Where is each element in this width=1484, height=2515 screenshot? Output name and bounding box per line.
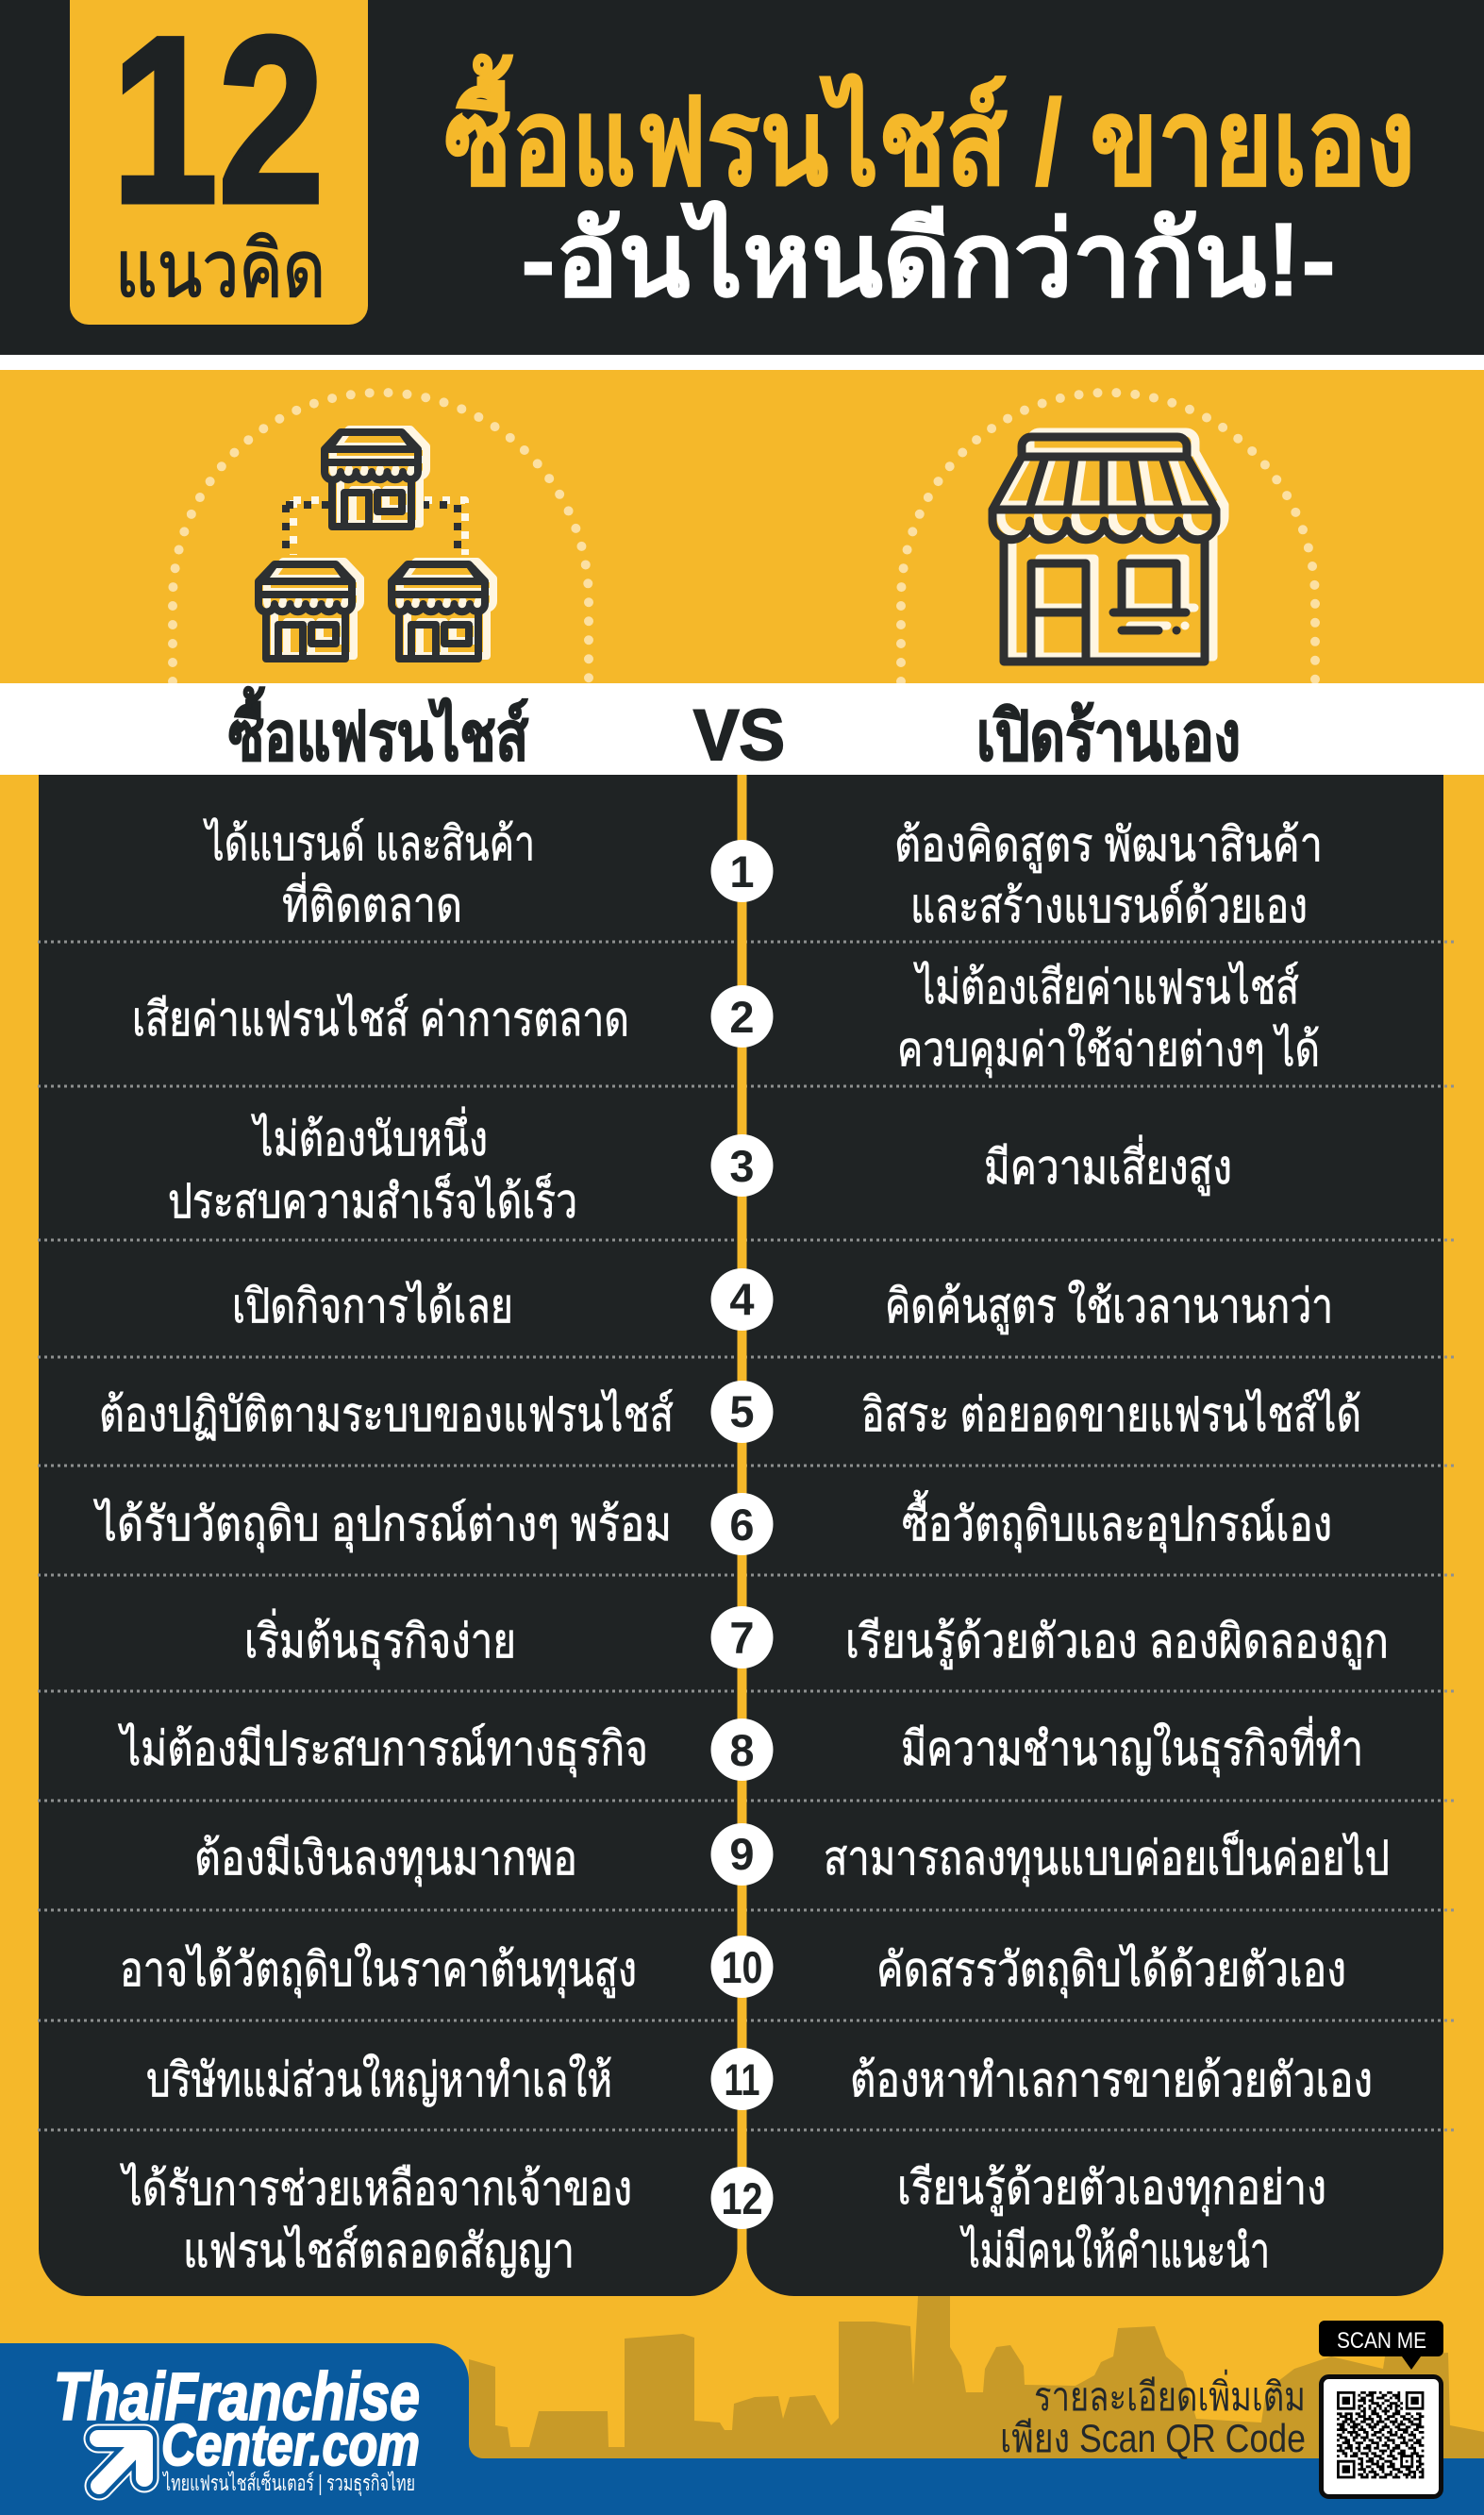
center spine with numbers: 12	[721, 2173, 762, 2223]
scan me bubble	[1319, 2321, 1443, 2370]
left column texts: ไม่ต้องนับหนึ่ง	[251, 1107, 488, 1165]
center spine with numbers: 10	[721, 1942, 762, 1992]
left column texts: เริ่มต้นธุรกิจง่าย	[244, 1609, 516, 1669]
logo wordmark line 2: Center.com	[161, 2413, 420, 2478]
left column texts: ที่ติดตลาด	[282, 873, 462, 931]
right column texts: เรียนรู้ด้วยตัวเองทุกอย่าง	[897, 2161, 1326, 2216]
right column texts: มีความเสี่ยงสูง	[984, 1135, 1232, 1196]
shop bottom right	[392, 562, 493, 659]
center spine with numbers: 4	[729, 1274, 755, 1324]
center spine with numbers: 8	[729, 1725, 755, 1775]
heading: buy franchise: ซื้อแฟรนไชส์	[228, 686, 528, 775]
footer blue band	[0, 2343, 1484, 2515]
QR code	[1321, 2376, 1442, 2497]
center spine with numbers: 2	[729, 992, 755, 1042]
connectors	[286, 500, 465, 557]
center spine with numbers	[711, 775, 774, 2296]
icon: franchise network of shops	[258, 429, 493, 659]
right column texts: ควบคุมค่าใช้จ่ายต่างๆ ได้	[897, 1023, 1320, 1078]
footer call to action: รายละเอียดเพิ่มเติม	[1034, 2370, 1306, 2419]
header band	[0, 0, 1484, 370]
left column texts: ต้องปฏิบัติตามระบบของแฟรนไชส์	[99, 1388, 674, 1441]
left column texts: อาจได้วัตถุดิบในราคาต้นทุนสูง	[120, 1943, 637, 1998]
left column texts: เสียค่าแฟรนไชส์ ค่าการตลาด	[132, 993, 629, 1046]
badge: 12 แนวคิด	[70, 0, 368, 325]
center spine with numbers: 3	[729, 1141, 755, 1191]
icon: single shop	[992, 432, 1225, 662]
left column texts: บริษัทแม่ส่วนใหญ่หาทำเลให้	[146, 2054, 612, 2106]
left panel	[39, 775, 738, 2296]
shop top	[325, 429, 426, 527]
skyline	[469, 2296, 1484, 2463]
logo	[54, 2360, 420, 2496]
left column texts: แฟรนไชส์ตลอดสัญญา	[183, 2224, 575, 2277]
center spine with numbers: 9	[729, 1829, 755, 1879]
logo arrow	[98, 2439, 144, 2486]
logo wordmark line 1: ThaiFranchise	[54, 2360, 420, 2435]
left column texts: ได้รับวัตถุดิบ อุปกรณ์ต่างๆ พร้อม	[93, 1498, 672, 1552]
footer call to action: เพียง Scan QR Code	[1000, 2416, 1306, 2460]
footer call to action	[1000, 2370, 1306, 2460]
right column texts: สามารถลงทุนแบบค่อยเป็นค่อยไป	[824, 1830, 1390, 1886]
right column texts: คิดค้นสูตร ใช้เวลานานกว่า	[885, 1280, 1333, 1334]
center spine with numbers: 6	[729, 1500, 755, 1550]
right column texts: และสร้างแบรนด์ด้วยเอง	[910, 880, 1308, 932]
left column texts: เปิดกิจการได้เลย	[232, 1280, 513, 1333]
center spine with numbers: 5	[729, 1386, 755, 1436]
center spine with numbers: 11	[725, 2054, 760, 2104]
center spine with numbers: 7	[729, 1613, 755, 1663]
left column texts: ได้แบรนด์ และสินค้า	[203, 817, 535, 870]
logo tagline: ไทยแฟรนไชส์เซ็นเตอร์ | รวมธุรกิจไทย	[162, 2469, 415, 2496]
shop bottom left	[258, 562, 360, 659]
right column texts: ไม่มีคนให้คำแนะนำ	[959, 2224, 1270, 2277]
right column texts: คัดสรรวัตถุดิบได้ด้วยตัวเอง	[876, 1943, 1346, 1998]
column header band	[0, 683, 1484, 776]
left column texts: ได้รับการช่วยเหลือจากเจ้าของ	[120, 2162, 632, 2215]
badge: 12 แนวคิด: แนวคิด	[115, 225, 325, 313]
left column texts: ไม่ต้องมีประสบการณ์ทางธุรกิจ	[118, 1722, 648, 1777]
right column texts: ต้องคิดสูตร พัฒนาสินค้า	[894, 818, 1323, 873]
right column texts: ต้องหาทำเลการขายด้วยตัวเอง	[850, 2054, 1373, 2106]
scan me bubble: SCAN ME	[1337, 2328, 1426, 2354]
left column texts	[93, 817, 674, 2277]
left column texts: ประสบความสำเร็จได้เร็ว	[168, 1173, 577, 1228]
title line 2: -อันไหนดีกว่ากัน!-	[521, 201, 1336, 318]
right column texts: เรียนรู้ด้วยตัวเอง ลองผิดลองถูก	[845, 1615, 1389, 1669]
right panel	[747, 775, 1443, 2296]
dotted arc left	[173, 393, 589, 681]
right column texts	[824, 818, 1390, 2277]
left column texts: ต้องมีเงินลงทุนมากพอ	[194, 1832, 577, 1886]
center spine with numbers: 1	[729, 847, 755, 897]
heading: VS: VS	[693, 696, 785, 776]
right column texts: อิสระ ต่อยอดขายแฟรนไชส์ได้	[861, 1388, 1361, 1441]
heading: open own store: เปิดร้านเอง	[976, 699, 1241, 775]
right column texts: ไม่ต้องเสียค่าแฟรนไชส์	[913, 961, 1299, 1014]
dotted arc right	[901, 393, 1315, 681]
right column texts: ซื้อวัตถุดิบและอุปกรณ์เอง	[902, 1490, 1332, 1552]
right column texts: มีความชำนาญในธุรกิจที่ทำ	[901, 1717, 1363, 1777]
